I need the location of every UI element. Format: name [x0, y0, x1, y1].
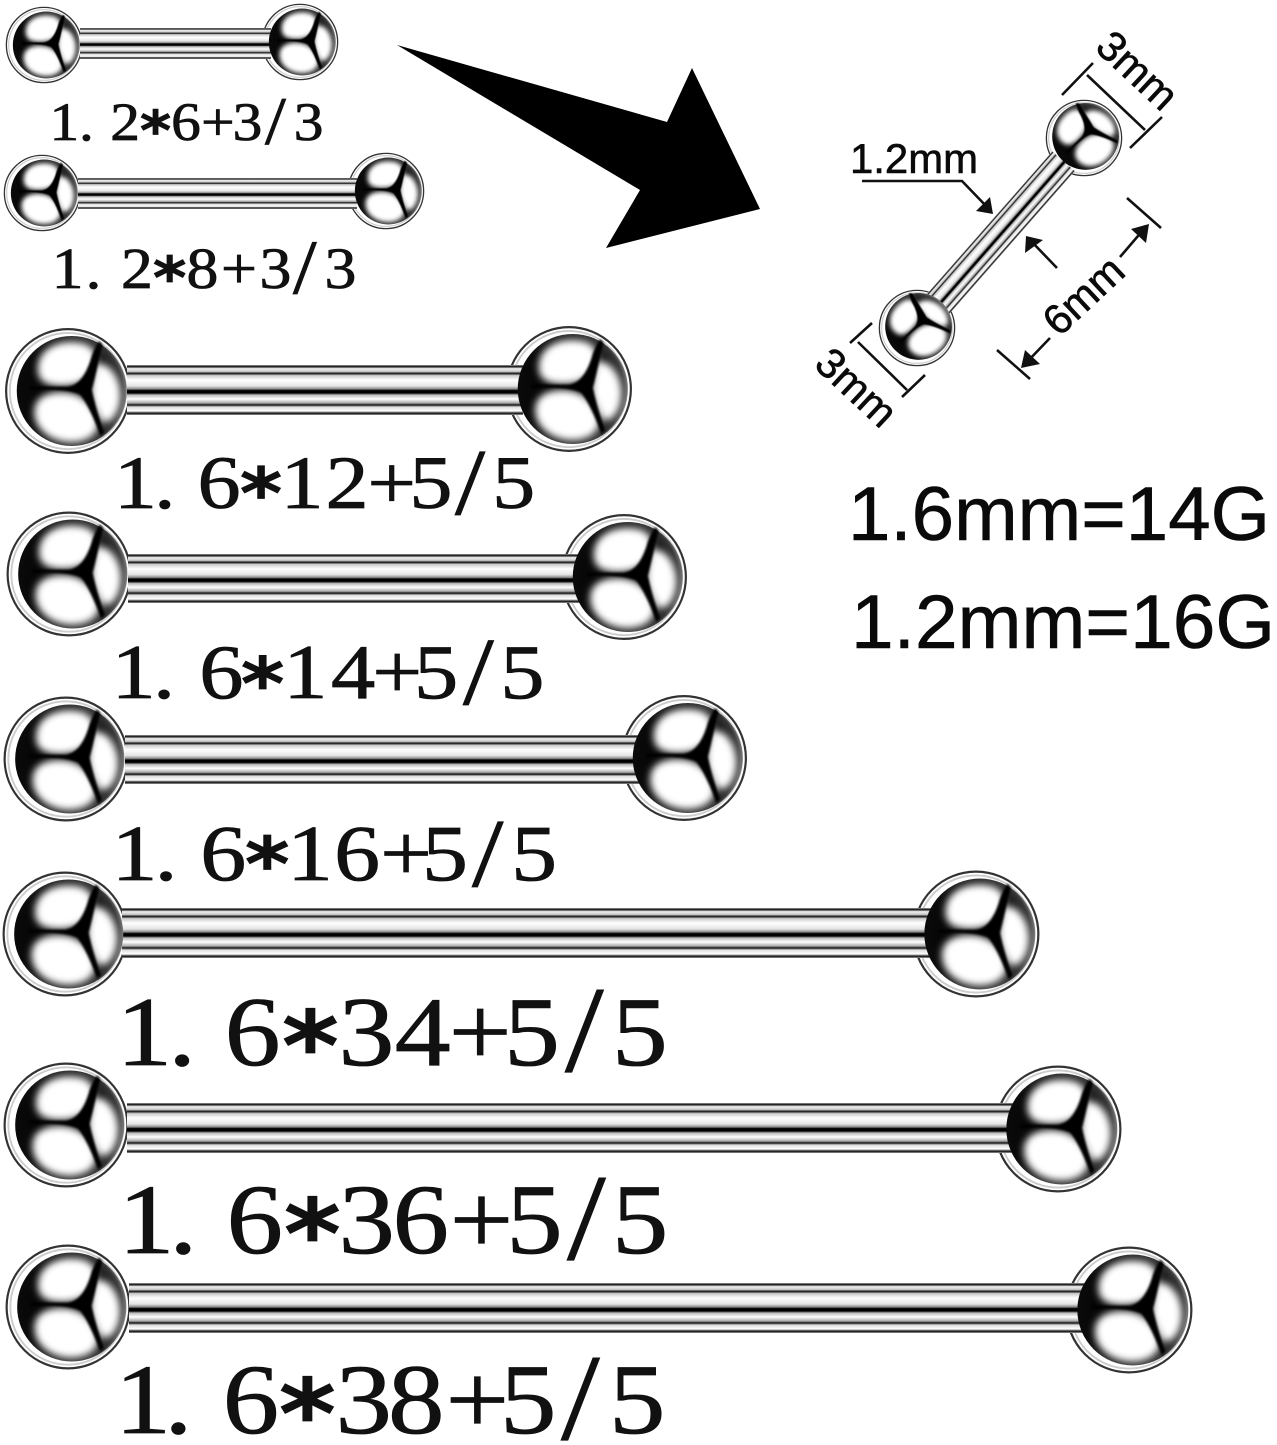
size label: 1.2*8+3/3: 8+3 — [187, 238, 291, 301]
barbell: 1.6*36+5/5 — [5, 1064, 1120, 1191]
size label: 1.6*34+5/5: * — [282, 992, 339, 1103]
size label: 1.6*12+5/5: * — [240, 453, 282, 535]
label: 6mm: 6mm — [1033, 246, 1134, 344]
size label: 1.2*6+3/3: 3 — [294, 92, 323, 152]
size label: 1.6*34+5/5: 34+5 — [339, 977, 560, 1087]
size label: 1.6*12+5/5: 5 — [492, 442, 535, 525]
size label: 1.6*14+5/5: * — [241, 643, 284, 727]
gauge conversion: 14G: 1.6mm=14G — [848, 472, 1270, 557]
size label: 1.6*36+5/5: 1. 6 — [118, 1165, 283, 1275]
barbell: 1.6*34+5/5 — [4, 872, 1038, 996]
size label: 1.6*14+5/5: / — [463, 620, 494, 725]
size label: 1.6*34+5/5: 5 — [612, 977, 668, 1087]
barbell illustration — [864, 85, 1137, 381]
size label: 1.2*8+3/3: 3 — [325, 238, 356, 301]
size label: 1.6*16+5/5: * — [245, 821, 289, 908]
label: 3mm top: 3mm — [1087, 21, 1188, 119]
size label: 1.2*8+3/3: * — [153, 245, 186, 312]
size label: 1.6*36+5/5: * — [284, 1180, 341, 1291]
label: 3mm bottom: 3mm — [806, 338, 907, 436]
size label: 1.2*8+3/3: 1. 2 — [52, 238, 153, 301]
barbell: 1.6*16+5/5 — [5, 696, 746, 820]
dimension lines and arrows — [850, 63, 1162, 397]
barbell: 1.6*12+5/5 — [6, 327, 631, 453]
size label: 1.6*34+5/5: 1. 6 — [116, 977, 281, 1087]
size label: 1.6*14+5/5: 1. 6 — [112, 629, 244, 715]
size label: 1.2*6+3/3: * — [140, 100, 171, 163]
size label: 1.6*12+5/5: 1. 6 — [114, 442, 241, 525]
gauge conversion: 16G: 1.2mm=16G — [851, 580, 1275, 665]
size label: 1.6*16+5/5: 5 — [511, 809, 557, 898]
size label: 1.6*34+5/5: / — [565, 962, 604, 1098]
barbell: 1.6*14+5/5 — [8, 513, 686, 639]
size label: 1.6*12+5/5: 12+5 — [280, 442, 453, 525]
size label: 1.6*36+5/5: 5 — [612, 1165, 668, 1275]
size label: 1.6*16+5/5: / — [472, 799, 504, 907]
size label: 1.2*6+3/3: 1. 2 — [50, 92, 140, 152]
diagram: annotated 1.2mm barbell — [806, 21, 1188, 436]
arrow: large black pointer — [397, 45, 760, 248]
size label: 1.6*14+5/5: 5 — [500, 629, 545, 715]
size label: 1.6*36+5/5: 36+5 — [339, 1165, 563, 1275]
size label: 1.2*6+3/3: / — [265, 84, 286, 159]
label: 1.2mm: 1.2mm — [850, 135, 978, 182]
size label: 1.6*16+5/5: 1. 6 — [112, 809, 246, 898]
size label: 1.6*16+5/5: 16+5 — [287, 809, 468, 898]
barbell: 1.2*6+3/3 — [6, 4, 338, 83]
size label: 1.6*14+5/5: 14+5 — [283, 629, 458, 715]
barbell: 1.2*8+3/3 — [4, 153, 424, 231]
size label: 1.2*6+3/3: 6+3 — [171, 92, 262, 152]
barbell: 1.6*38+5/5 — [7, 1246, 1191, 1372]
size label: 1.6*12+5/5: / — [455, 430, 486, 534]
size label: 1.6*36+5/5: / — [567, 1150, 606, 1286]
size label: 1.2*8+3/3: / — [293, 225, 317, 310]
